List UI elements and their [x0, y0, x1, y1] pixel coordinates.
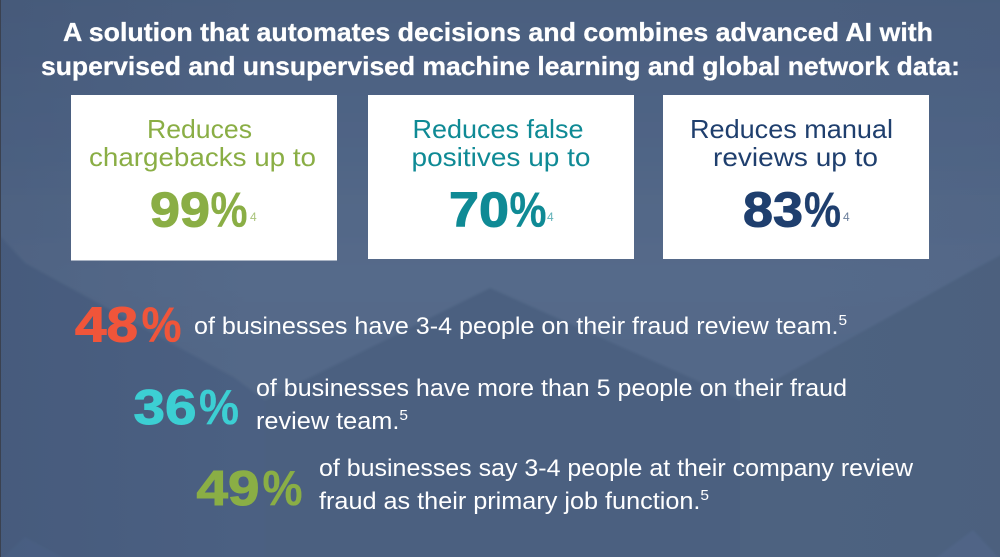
stat: 49 percent: 5 — [700, 487, 709, 504]
panel: reduces chargebacks: 4 — [250, 210, 257, 224]
stat: 48 percent: 48 — [75, 298, 138, 352]
stat: 48 percent: of businesses have 3-4 people on their fraud review team. — [194, 313, 823, 340]
stat: 48 percent — [75, 298, 847, 352]
panel: reduces chargebacks: Reduces — [147, 114, 252, 144]
panel: reduces manual reviews: % — [804, 184, 841, 238]
stat: 48 percent: 5 — [838, 312, 847, 329]
title: A solution that automates decisions and combines advanced AI with — [63, 17, 933, 47]
panel: reduces manual reviews: 4 — [843, 210, 850, 224]
panel: reduces false positives: positives up to — [412, 142, 590, 172]
panel: reduces false positives — [368, 95, 634, 259]
panel: reduces chargebacks: % — [210, 184, 248, 238]
stat: 36 percent: of businesses have more than 5 people on their fraud — [256, 375, 847, 402]
stat: 36 percent: % — [199, 381, 239, 435]
panel: reduces manual reviews: Reduces manual — [690, 114, 893, 144]
stat: 49 percent — [196, 455, 913, 516]
stat: 36 percent: 5 — [399, 407, 408, 424]
panel: reduces chargebacks: chargebacks up to — [89, 142, 316, 172]
panel: reduces false positives: Reduces false — [412, 114, 584, 144]
stat: 48 percent: % — [142, 298, 182, 352]
panel: reduces manual reviews — [663, 95, 929, 259]
stat: 36 percent — [134, 375, 847, 435]
stat: 49 percent: 49 — [196, 462, 260, 516]
stat: 49 percent: of businesses say 3-4 people at their company review — [319, 455, 913, 482]
stat: 49 percent: fraud as their primary job function. — [319, 488, 689, 515]
stat: 36 percent: 36 — [134, 381, 196, 435]
panel: reduces false positives: % — [510, 184, 546, 238]
panel: reduces manual reviews: reviews up to — [713, 142, 878, 172]
stat: 36 percent: review team. — [256, 408, 395, 435]
panel: reduces manual reviews: 83 — [743, 184, 803, 238]
title — [41, 17, 960, 81]
stat: 49 percent: % — [262, 462, 302, 516]
panel: reduces false positives: 4 — [547, 210, 554, 224]
panel: reduces chargebacks — [71, 95, 337, 260]
panel: reduces chargebacks: 99 — [150, 184, 210, 238]
panel: reduces false positives: 70 — [449, 184, 509, 238]
title: supervised and unsupervised machine learning and global network data: — [41, 51, 960, 81]
